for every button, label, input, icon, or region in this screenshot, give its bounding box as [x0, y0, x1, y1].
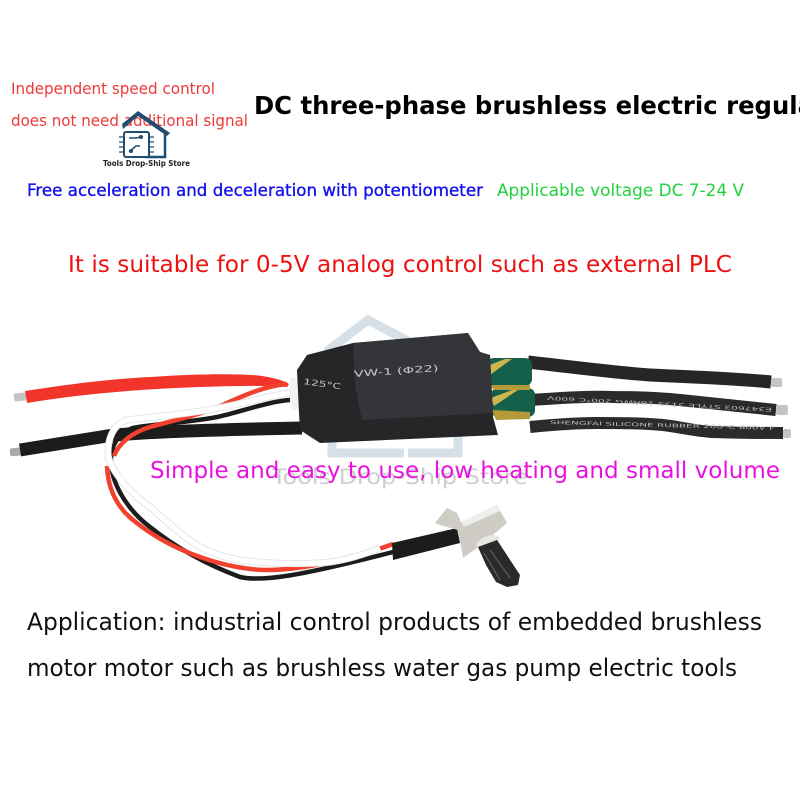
- text: analog control suitability: It is suitable for 0-5V analog control such as external PLC: [68, 252, 732, 278]
- heading: independent speed control note: Independent speed control: [11, 79, 215, 98]
- controller body: [297, 333, 498, 443]
- watermark: pale store logo behind product: [271, 320, 528, 489]
- icon: store logo: Tools Drop-Ship Store: [103, 159, 191, 168]
- black power wire: [10, 428, 302, 456]
- right motor wires: [528, 362, 791, 438]
- product photo illustration: brushless controller: [10, 333, 791, 587]
- red power wire: [14, 374, 289, 403]
- icon: store logo: [103, 111, 191, 168]
- three-colour signal cable to potentiometer: [107, 384, 393, 579]
- text: application description: Application: industrial control products of embedded brushless: [27, 608, 762, 636]
- right motor wires: SHENGFAI SILICONE RUBBER 200°C 600V F: [550, 420, 775, 432]
- text: applicable voltage: Applicable voltage DC 7-24 V: [497, 181, 744, 201]
- heading: independent speed control note: [11, 79, 248, 130]
- controller body: VW-1 (Φ22): [354, 364, 439, 380]
- text: application description: motor motor such as brushless water gas pump electric tools: [27, 654, 737, 682]
- text: acceleration and deceleration feature: Free acceleration and deceleration with potentiometer: [27, 181, 483, 201]
- green capacitors: [487, 358, 535, 420]
- controller body: 125°C: [303, 377, 342, 391]
- heading: independent speed control note: does not need additional signal: [11, 111, 248, 130]
- potentiometer: [392, 505, 520, 587]
- white connector: [290, 378, 300, 411]
- text: application description: [27, 608, 762, 682]
- text: simple and easy feature: Simple and easy to use, low heating and small volume: [150, 458, 780, 484]
- right motor wires: E347603 STYLE 3135 18AWG 200°C 600V: [546, 394, 772, 412]
- watermark: pale store logo behind product: Tools Drop-Ship Store: [271, 465, 528, 489]
